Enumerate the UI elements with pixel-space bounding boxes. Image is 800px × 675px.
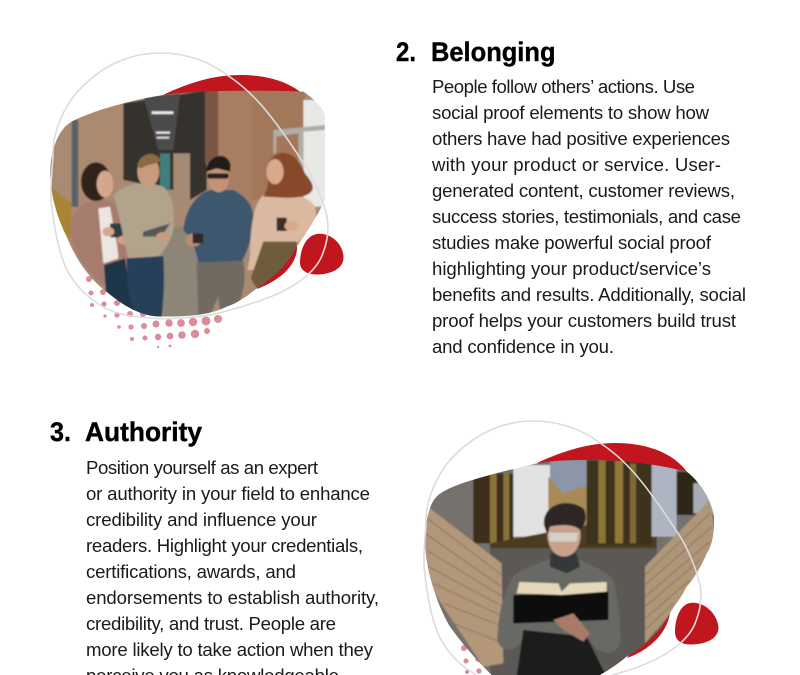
- heading: 2. Belonging: Belonging: [431, 37, 556, 67]
- text block: authority body: credibility, and trust. People are: [86, 613, 336, 634]
- text block: belonging body: [431, 76, 746, 357]
- text block: authority body: readers. Highlight your credentials,: [86, 535, 363, 556]
- text block: belonging body: and confidence in you.: [432, 336, 614, 357]
- text block: authority body: more likely to take action when they: [86, 639, 374, 660]
- text block: belonging body: with your product or service. User-: [431, 154, 721, 175]
- text block: authority body: or authority in your field to enhance: [86, 483, 370, 504]
- text block: authority body: endorsements to establish authority,: [86, 587, 379, 608]
- text block: belonging body: others have had positive experiences: [432, 128, 730, 149]
- text block: belonging body: generated content, customer reviews,: [432, 180, 735, 201]
- heading: 3. Authority: 3.: [50, 417, 71, 447]
- text block: authority body: credibility and influence your: [86, 509, 317, 530]
- red swoosh top: [537, 443, 687, 472]
- heading: 3. Authority: Authority: [85, 417, 202, 447]
- text block: belonging body: benefits and results. Additionally, social: [432, 284, 746, 305]
- red drop shape: [300, 234, 344, 275]
- illustration: man reading a book: [420, 421, 720, 675]
- red swoosh lower: [257, 245, 297, 289]
- text block: belonging body: highlighting your product/service’s: [432, 258, 711, 279]
- red swoosh lower: [627, 612, 670, 658]
- thin grey outline: [424, 421, 701, 675]
- text block: authority body: certifications, awards, and: [86, 561, 296, 582]
- heading: 2. Belonging: 2.: [396, 37, 416, 67]
- photo: reader among card catalogues: [420, 457, 720, 675]
- text block: belonging body: studies make powerful social proof: [432, 232, 712, 253]
- text block: belonging body: success stories, testimonials, and case: [432, 206, 741, 227]
- illustration: team walking in corridor: [43, 53, 344, 348]
- text block: belonging body: social proof elements to show how: [432, 102, 710, 123]
- red drop shape: [675, 603, 718, 645]
- thin grey outline: [51, 53, 328, 319]
- photo: four colleagues: [43, 87, 330, 320]
- text block: authority body: [86, 457, 379, 675]
- halftone dots: [86, 276, 222, 348]
- halftone dots: [461, 645, 495, 674]
- red swoosh top: [163, 75, 313, 105]
- text block: belonging body: People follow others’ actions. Use: [432, 76, 695, 97]
- text block: belonging body: proof helps your customers build trust: [432, 310, 737, 331]
- text block: authority body: Position yourself as an expert: [86, 457, 319, 478]
